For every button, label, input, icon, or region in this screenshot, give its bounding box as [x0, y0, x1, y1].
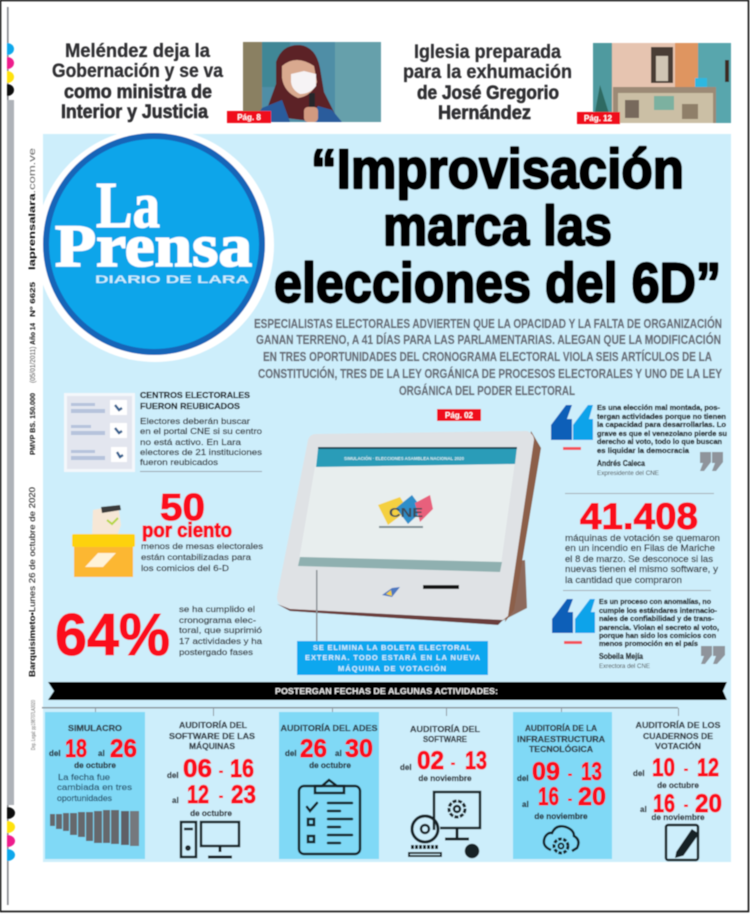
text: centros electorales: electores de 21 instituciones: [140, 447, 262, 457]
quote: Andrés Caleca: Andrés Caleca: [597, 459, 645, 468]
main headline: marca las: [383, 194, 612, 257]
column: auditoria software: SOFTWARE: [423, 734, 467, 744]
photo: woman with mask: [243, 42, 381, 122]
icon: ballot box: [72, 505, 135, 577]
quote: Sobeila Mejía: nales de confiabilidad y de trans-: [599, 614, 714, 623]
column: auditoria software: [400, 723, 487, 857]
column: auditoria infraestructura: 16: [538, 783, 559, 811]
stat: 64%: cronograma elec-: [179, 615, 256, 625]
column: auditoria cuadernos: AUDITORÍA DE LOS: [636, 719, 721, 730]
quote: Andrés Caleca: la capacidad para desarrollarlas. Lo: [597, 420, 726, 429]
column: auditoria software maquinas: 23: [231, 781, 256, 809]
logo: La Prensa: DIARIO DE LARA: [95, 274, 249, 286]
ribbon: postergan fechas: POSTERGAN FECHAS DE ALGUNAS ACTIVIDADES:: [275, 686, 498, 696]
stat: 41.408 machines: la cantidad que compraron: [565, 575, 682, 585]
teaser headline: Meléndez: Interior y Justicia: [61, 102, 208, 123]
side edition strip: Dep. Legal: pp198707LA3020: [31, 700, 37, 750]
teaser headline: Iglesia: [403, 42, 572, 124]
column: auditoria cuadernos: CUADERNOS DE: [643, 731, 713, 741]
text: centros electorales: [140, 390, 262, 472]
subheading: ORGÁNICA DEL PODER ELECTORAL: [399, 383, 575, 398]
callout: boleta electoral: SE ELIMINA LA BOLETA ELECTORAL: [313, 643, 471, 652]
crop margin bar: [7, 7, 14, 905]
column: simulacro: oportunidades: [57, 793, 112, 803]
leader line: [316, 570, 318, 641]
column: auditoria ades: al: [335, 749, 342, 758]
stat: 50 por ciento: los comicios del 6-D: [141, 563, 229, 573]
quote: Andrés Caleca: grave es que el venezolano pierde su: [597, 429, 727, 438]
column: auditoria ades: de octubre: [309, 761, 351, 770]
stat: 64%: postergado fases: [179, 647, 253, 657]
teaser headline: Meléndez: [52, 41, 223, 123]
page tag 8: [227, 111, 271, 123]
text: centros electorales: FUERON REUBICADOS: [140, 401, 240, 411]
stat: 64%: 17 actividades y ha: [179, 636, 262, 646]
column: auditoria infraestructura: [513, 712, 612, 859]
column: simulacro: cambiada en tres: [57, 782, 132, 792]
column: auditoria cuadernos: [633, 719, 722, 860]
column: simulacro: del: [49, 749, 61, 758]
column: auditoria software: del: [400, 763, 412, 772]
quote: Sobeila Mejía: [552, 597, 725, 670]
column: auditoria software: de noviembre: [418, 774, 472, 783]
column: simulacro: de octubre: [74, 761, 116, 770]
stat: 41.408 machines: el 8 de marzo. Se desconoce si las: [565, 554, 714, 564]
main headline: [274, 137, 721, 314]
callout: boleta electoral: [297, 641, 488, 675]
column: simulacro: 26: [110, 735, 137, 763]
quote: Andrés Caleca: Es una elección mal montada, pos-: [597, 403, 720, 412]
column: auditoria software maquinas: [167, 719, 256, 857]
quote: Sobeila Mejía: Exrectora del CNE: [599, 664, 650, 670]
icon: opening quote marks: [551, 405, 593, 450]
stat: 50 por ciento: 50: [160, 487, 205, 529]
page tag 02: [437, 409, 481, 421]
text: centros electorales: fueron reubicados: [140, 457, 218, 467]
stat: 64%: toral, que suprimió: [179, 625, 262, 635]
quote: Andrés Caleca: [551, 403, 727, 477]
column: auditoria software maquinas: al: [172, 796, 179, 805]
stat: 64%: se ha cumplido el: [179, 604, 255, 614]
column: auditoria infraestructura: de noviembre: [534, 812, 588, 821]
column: auditoria ades: 26: [300, 735, 327, 763]
side edition strip: Nº 6625: [30, 282, 37, 317]
column: simulacro: La fecha fue: [58, 772, 110, 782]
icon: closing quote marks two: [701, 646, 725, 664]
main panel background: [43, 134, 731, 862]
icon: cloud gear: [544, 826, 578, 853]
column: auditoria infraestructura: INFRAESTRUCTURA: [517, 734, 605, 744]
column: auditoria software maquinas: SOFTWARE DE LAS: [169, 731, 255, 741]
column: auditoria infraestructura: TECNOLÓGICA: [529, 743, 593, 754]
text: centros electorales: en el portal CNE si su centro: [140, 426, 262, 436]
column: auditoria cuadernos: al: [640, 805, 647, 814]
teaser headline: Meléndez: Meléndez deja la: [65, 41, 210, 62]
colour registration marks bottom: [7, 807, 15, 861]
icon: queue of people: [50, 810, 139, 846]
column: auditoria ades: 30: [345, 735, 373, 763]
logo: La Prensa: La: [96, 169, 160, 242]
callout: boleta electoral: EXTERNA. TODO ESTARÁ EN LA NUEVA: [305, 653, 481, 662]
logo: La Prensa: [36, 128, 274, 362]
text: centros electorales: no está activo. En Lara: [140, 437, 241, 447]
quote: Andrés Caleca: es liquidar la democracia: [597, 446, 690, 455]
column: auditoria cuadernos: -: [684, 798, 688, 812]
column: auditoria cuadernos: 16: [653, 790, 675, 818]
voting machine: SIMULACIÓN · ELECCIONES ASAMBLEA NACIONAL 2020: [344, 454, 464, 461]
stat: 64%: 64%: [55, 602, 170, 668]
column: auditoria software maquinas: MÁQUINAS: [189, 740, 235, 751]
column: simulacro: SIMULACRO: [68, 723, 123, 733]
quote: Andrés Caleca: derecho al voto, todo lo que buscan: [597, 437, 722, 446]
quote: Sobeila Mejía: Es un proceso con anomalías, no: [599, 597, 711, 606]
icon: checklist document: [64, 393, 135, 472]
column: auditoria infraestructura: 20: [578, 783, 606, 811]
quote: Andrés Caleca: Expresidente del CNE: [597, 471, 659, 477]
quote: Sobeila Mejía: cumple los estándares internacio-: [599, 606, 717, 615]
column: auditoria infraestructura: del: [517, 774, 529, 783]
stat: 50 por ciento: [141, 487, 263, 573]
page tag 8: Pág. 8: [237, 113, 261, 122]
stat: 41.408 machines: en un incendio en Filas de Mariche: [565, 543, 715, 553]
side edition strip: laprensalara.com.ve: [27, 148, 38, 270]
ribbon: postergan fechas: [48, 682, 727, 700]
stat: 64%: [55, 602, 262, 668]
quote: Sobeila Mejía: menos promoción en el país: [599, 639, 698, 648]
text: centros electorales: Electores deberán buscar: [140, 416, 250, 426]
column: auditoria software maquinas: de octubre: [190, 809, 232, 818]
photo: church altar: [593, 43, 731, 123]
column: simulacro: al: [98, 749, 105, 758]
icon: notebook and pen: [666, 825, 698, 860]
column: auditoria software: 13: [465, 747, 487, 775]
page tag 12: [577, 112, 620, 124]
page tag 02: Pág. 02: [445, 411, 474, 420]
voting machine: CNE: [389, 505, 423, 520]
icon: opening quote marks two: [552, 599, 595, 644]
column: auditoria software maquinas: 12: [187, 781, 209, 809]
quote: Andrés Caleca: tergan actividades porque no tienen: [597, 412, 726, 421]
main headline: “Improvisación: [311, 137, 684, 200]
stat: 50 por ciento: menos de mesas electorales: [141, 541, 263, 551]
column: auditoria cuadernos: de octubre: [657, 781, 699, 790]
column: auditoria cuadernos: 12: [697, 754, 719, 782]
side edition strip: [27, 148, 38, 750]
column: auditoria ades: [279, 712, 379, 859]
side edition strip: (05/01/2011) Año 14: [30, 323, 37, 383]
column: auditoria cuadernos: -: [684, 762, 688, 776]
teaser headline: Iglesia: para la exhumación: [403, 62, 572, 83]
column: auditoria cuadernos: de noviembre: [651, 813, 705, 822]
icon: monitor with gear and disc: [409, 792, 480, 857]
column: auditoria software: 02: [417, 747, 444, 775]
logo: La Prensa: Prensa: [55, 213, 252, 279]
teaser headline: Iglesia: de José Gregorio: [417, 83, 559, 104]
side edition strip: PMVP BS. 150.000: [28, 393, 37, 455]
side edition strip: Barquisimeto•Lunes 26 de octubre de 2020: [28, 486, 37, 677]
stat: 41.408 machines: [563, 493, 720, 591]
colour registration marks top: [7, 43, 14, 96]
quote: Sobeila Mejía: parencia. Violan el secreto al voto,: [599, 623, 719, 632]
page tag 12: Pág. 12: [584, 114, 613, 123]
callout: boleta electoral: MÁQUINA DE VOTACIÓN: [338, 664, 446, 673]
column: auditoria cuadernos: 20: [695, 790, 722, 818]
teaser headline: Meléndez: como ministra de: [64, 82, 212, 103]
column: auditoria infraestructura: -: [568, 792, 572, 806]
icon: clipboard checklist: [299, 780, 360, 854]
column: auditoria ades: AUDITORÍA DEL ADES: [280, 722, 378, 733]
column: auditoria infraestructura: al: [522, 800, 529, 809]
quote: Sobeila Mejía: Sobeila Mejía: [599, 652, 643, 661]
teaser headline: Meléndez: Gobernación y se va: [52, 61, 223, 82]
column: auditoria infraestructura: 13: [581, 758, 602, 786]
icon: desktop computer: [181, 822, 239, 857]
column: auditoria cuadernos: del: [633, 769, 645, 778]
stat: 41.408 machines: máquinas de votación se quemaron: [565, 533, 720, 543]
column: simulacro: 18: [65, 735, 87, 763]
icon: closing quote marks: [700, 452, 723, 471]
timeline connector: [42, 707, 679, 716]
teaser headline: Iglesia: Iglesia preparada: [414, 42, 561, 63]
column: auditoria infraestructura: -: [568, 767, 572, 781]
stat: 50 por ciento: están contabilizadas para: [141, 552, 251, 562]
column: auditoria software maquinas: AUDITORÍA DEL: [179, 719, 247, 730]
column: auditoria software maquinas: 06: [183, 755, 212, 783]
column: auditoria infraestructura: 09: [532, 758, 560, 786]
stat: 50 por ciento: por ciento: [142, 520, 232, 542]
column: auditoria software maquinas: 16: [230, 755, 254, 783]
column: auditoria ades: del: [285, 749, 297, 758]
text: centros electorales: CENTROS ELECTORALES: [140, 390, 250, 400]
column: auditoria software maquinas: -: [219, 764, 223, 778]
voting machine: [277, 431, 541, 625]
column: simulacro: [45, 712, 145, 859]
stat: 41.408 machines: 41.408: [580, 496, 698, 537]
column: auditoria software: -: [451, 756, 455, 770]
column: auditoria software maquinas: del: [167, 771, 179, 780]
subheading: [254, 316, 722, 398]
column: auditoria software maquinas: -: [219, 789, 223, 803]
column: auditoria cuadernos: 10: [652, 754, 675, 782]
teaser headline: Iglesia: Hernández: [438, 103, 531, 124]
stat: 41.408 machines: nuevas tienen el mismo software, y: [565, 564, 719, 574]
column: auditoria cuadernos: VOTACIÓN: [655, 740, 701, 751]
column: auditoria software: AUDITORÍA DEL: [410, 723, 480, 734]
column: auditoria infraestructura: AUDITORÍA DE LA: [525, 722, 597, 733]
quote: Sobeila Mejía: porque han sido los comicios con: [599, 631, 716, 640]
